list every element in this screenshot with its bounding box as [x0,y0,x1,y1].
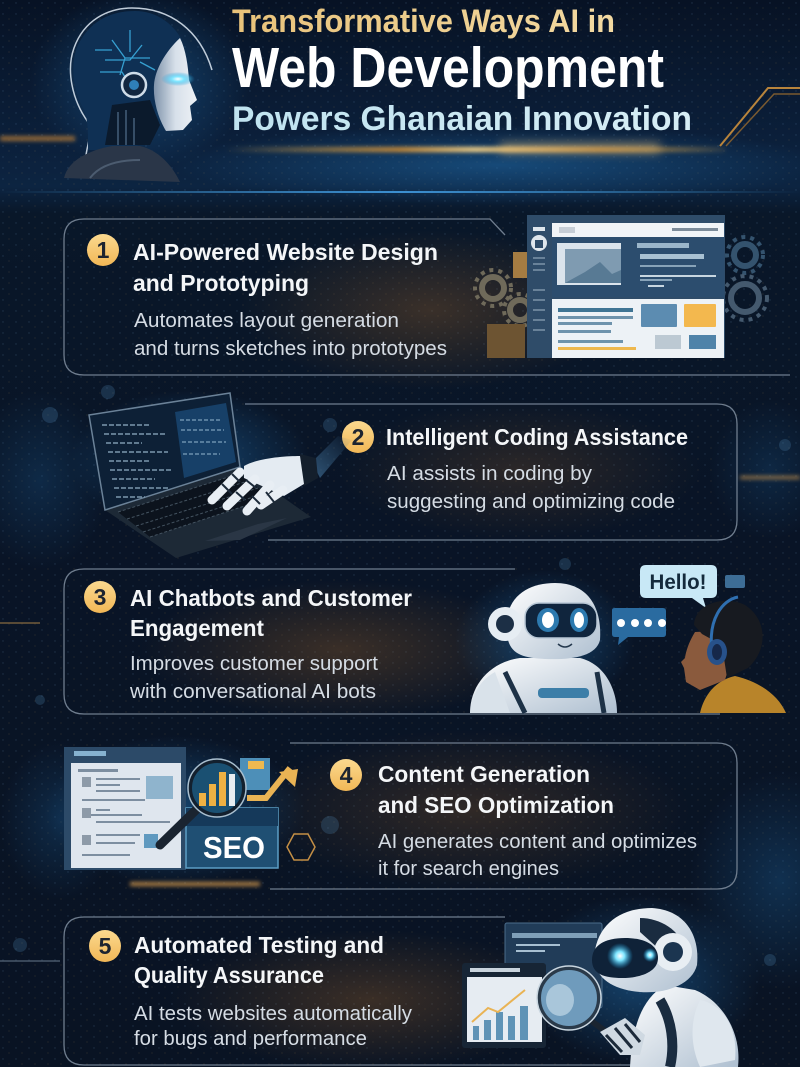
icon: laptop with robot hand [70,390,352,558]
description 4: it for search engines [378,858,559,880]
icon: QA robot with tablet and magnifier [462,895,760,1067]
heading 4: Content Generation [378,761,590,787]
icon: chatbot [455,570,635,713]
badge 5 [89,930,121,962]
description 3: Improves customer support [130,653,378,675]
panel: step 3 [64,569,720,714]
description 2: AI assists in coding by [387,463,592,485]
heading 3: AI Chatbots and Customer [130,585,412,611]
badge 1: 1 [97,237,110,263]
badge 5: 5 [99,933,112,959]
title line 2: Web Development [232,36,664,100]
chat bubble: dots [612,608,666,645]
icon: website mockup with gears [475,215,767,358]
badge 4: 4 [340,762,353,788]
description 4: AI generates content and optimizes [378,831,697,853]
description 5: AI tests websites automatically [134,1003,412,1025]
description 1: Automates layout generation [134,310,399,332]
heading 5: Automated Testing and [134,932,384,958]
title line 3: Powers Ghanaian Innovation [232,100,692,138]
heading 1: and Prototyping [133,270,309,296]
badge 2: 2 [352,424,364,450]
chat bubble: Hello [640,565,745,608]
panel: step 1 [64,219,790,375]
description 1: and turns sketches into prototypes [134,338,447,360]
description 3: with conversational AI bots [129,681,376,703]
icon: SEO page and magnifier: SEO [203,830,265,865]
badge 4 [330,759,362,791]
panel: step 5 [64,917,700,1065]
heading 1: AI-Powered Website Design [133,239,438,265]
badge 2 [342,421,374,453]
header glow lines [0,88,800,193]
heading 3: Engagement [130,615,264,641]
heading 4: and SEO Optimization [378,792,614,818]
description 5: for bugs and performance [134,1028,367,1050]
panel: step 2 [245,404,737,540]
heading 2: Intelligent Coding Assistance [386,424,688,450]
title line 1: Transformative Ways AI in [232,3,615,39]
badge 3: 3 [94,584,106,610]
icon: man with headset [681,597,786,713]
description 2: suggesting and optimizing code [387,491,675,513]
panel: step 4 [130,743,737,889]
badge 3 [84,581,116,613]
icon: SEO page and magnifier [45,735,315,885]
icon: AI head [64,8,212,182]
badge 1 [87,234,119,266]
chat bubble: Hello: Hello! [650,571,706,594]
heading 5: Quality Assurance [134,962,324,988]
title [232,3,692,138]
